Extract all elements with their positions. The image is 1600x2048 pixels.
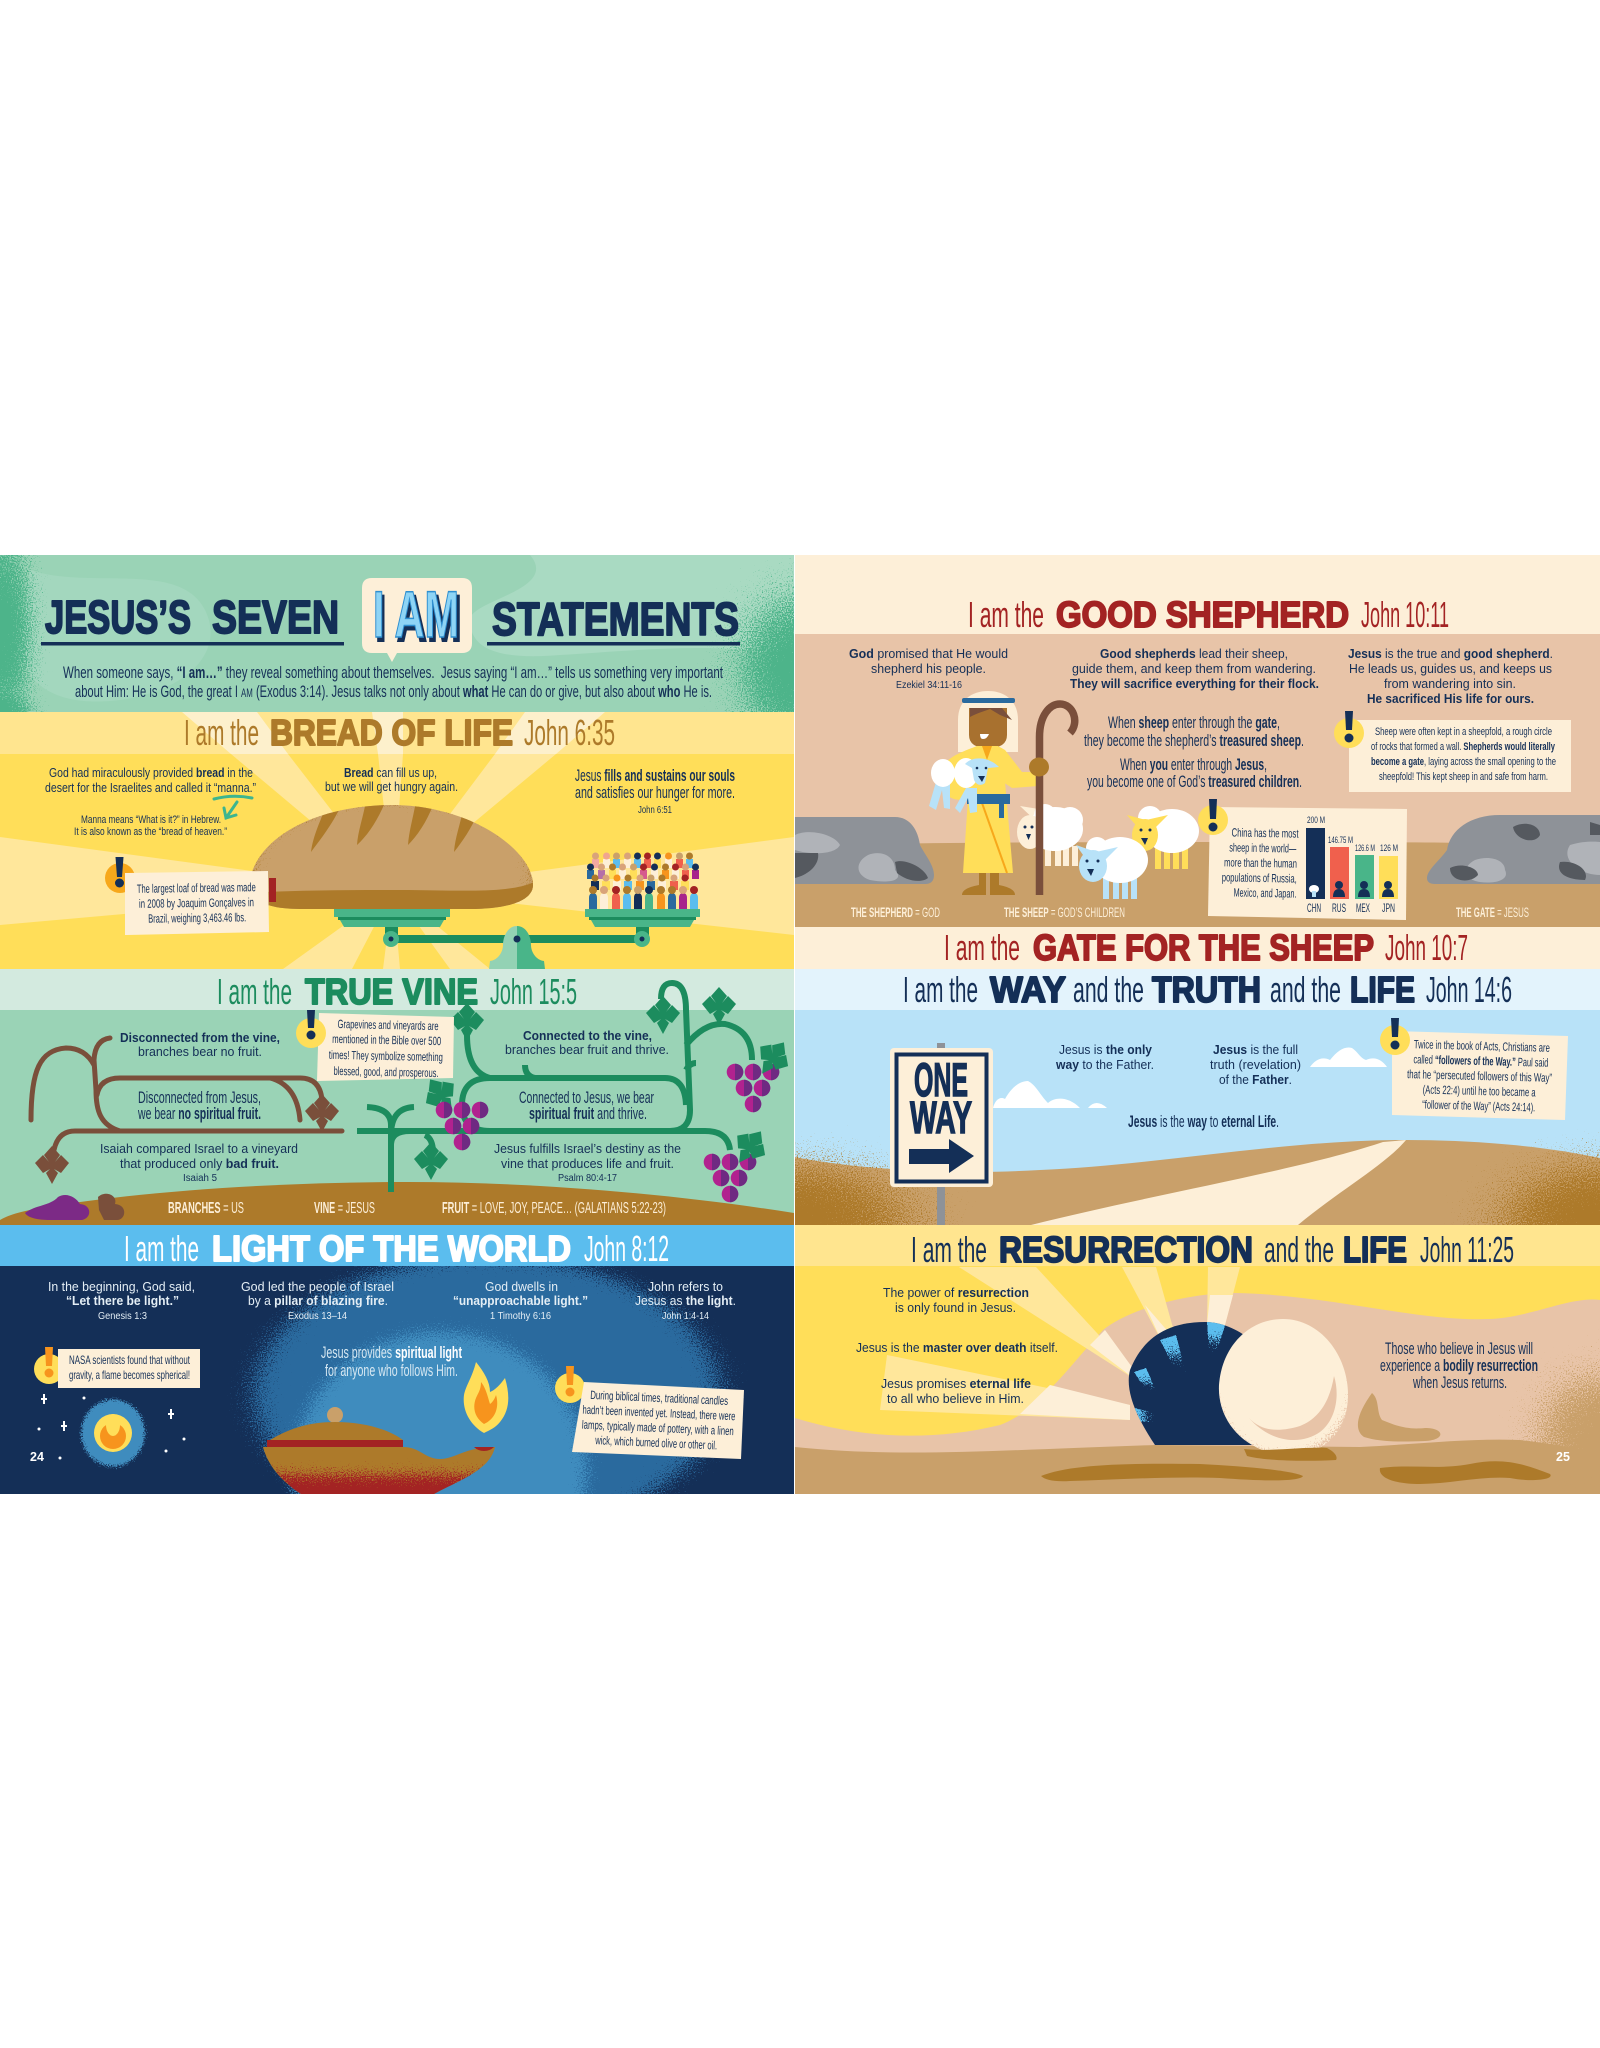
one way sign <box>890 1043 993 1225</box>
heading: bread of life: John 6:35 <box>524 712 615 753</box>
text: resurrection statements: to all who believe in Him. <box>887 1391 1024 1406</box>
oil lamp <box>255 1407 505 1494</box>
text: resurrection statements: The power of resurrection <box>883 1285 1029 1300</box>
heading: true vine: TRUE VINE <box>305 971 478 1012</box>
callout: followers of the way <box>1380 1018 1568 1120</box>
rock wall left <box>795 817 934 884</box>
text: connected: branches bear fruit and thrive. <box>505 1042 669 1057</box>
text: three shepherd columns: God promised that He would <box>849 646 1008 661</box>
text: disconnected: Disconnected from Jesus, <box>138 1089 261 1107</box>
text: disconnected: we bear no spiritual fruit. <box>137 1105 261 1123</box>
callout: largest loaf: The largest loaf of bread was made <box>137 880 256 896</box>
panel: light of the world <box>0 1225 794 1494</box>
text: four light references <box>48 1279 736 1322</box>
title: Jesus's Seven: SEVEN <box>212 591 339 643</box>
bar chart: 126 M <box>1380 843 1398 853</box>
text: resurrection statements <box>856 1285 1058 1406</box>
text: four light references: God led the people of Israel <box>241 1279 394 1294</box>
text: disconnected: that produced only bad fruit. <box>120 1156 279 1171</box>
callout: sheep population chart: Mexico, and Japan. <box>1233 886 1297 901</box>
text: disconnected: branches bear no fruit. <box>138 1044 262 1059</box>
crowd of people <box>587 852 699 909</box>
callout: lamps: hadn’t been invented yet. Instead, there were <box>582 1403 736 1423</box>
callout: grapevines: times! They symbolize something <box>329 1048 443 1064</box>
text: way statements: Jesus is the only <box>1059 1042 1153 1057</box>
text: manna: desert for the Israelites and called it “manna.” <box>45 780 256 795</box>
text: three shepherd columns: Jesus is the true and good shepherd. <box>1348 646 1553 661</box>
text: three shepherd columns: guide them, and keep them from wandering. <box>1072 661 1316 676</box>
heading: true vine: John 15:5 <box>490 971 577 1012</box>
text: three shepherd columns: He sacrificed His life for ours. <box>1367 691 1534 706</box>
green living vine <box>357 983 752 1192</box>
heading band: resurrection <box>795 1225 1600 1266</box>
text: three shepherd columns: shepherd his people. <box>871 661 986 676</box>
text: way statements: of the Father. <box>1219 1072 1292 1087</box>
heading: way truth life: LIFE <box>1350 969 1415 1010</box>
light rays over sky <box>880 1267 1240 1420</box>
heading: bread of life <box>186 718 614 746</box>
text: bodily resurrection <box>1380 1340 1538 1392</box>
heading: gate for the sheep: I am the <box>944 927 1020 968</box>
peach hill <box>795 1293 1600 1494</box>
text: manna <box>45 765 256 838</box>
callout: largest loaf <box>105 857 269 935</box>
shepherd hand <box>1029 758 1049 776</box>
text: sheep and gate: When you enter through Jesus, <box>1120 756 1267 774</box>
text: three shepherd columns: from wandering into sin. <box>1384 676 1516 691</box>
bread loaf <box>252 805 533 909</box>
ground legend: FRUIT = LOVE, JOY, PEACE… (GALATIANS 5:22-23) <box>442 1200 666 1217</box>
heading: way truth life <box>903 969 1512 1010</box>
text: four light references: “unapproachable light.” <box>453 1293 588 1308</box>
one way sign: WAY <box>910 1092 972 1143</box>
callout: largest loaf: in 2008 by Joaquim Gonçalves in <box>139 895 254 911</box>
rock wall right <box>1427 815 1600 884</box>
dead brown vine <box>31 1038 342 1184</box>
heading: bread of life: I am the <box>184 712 259 753</box>
callout: sheepfold <box>1334 711 1571 792</box>
bar chart: CHN <box>1307 901 1321 915</box>
callout: lamps <box>555 1366 744 1459</box>
one way sign: ONE <box>914 1053 968 1106</box>
callout: followers of the way: (Acts 22:4) until he too became a <box>1422 1083 1536 1099</box>
text: spiritual light: for anyone who follows Him. <box>325 1362 458 1380</box>
intro paragraph <box>63 663 723 701</box>
text: three shepherd columns: They will sacrifice everything for their flock. <box>1070 676 1319 691</box>
text: resurrection statements: is only found in Jesus. <box>895 1300 1016 1315</box>
grapes <box>436 1033 798 1202</box>
text: four light references: In the beginning, God said, <box>48 1279 195 1294</box>
text: four light references: God dwells in <box>485 1279 558 1294</box>
title: Jesus's Seven: JESUS’S <box>45 591 191 643</box>
heading: light of the world: LIGHT OF THE WORLD <box>212 1228 571 1269</box>
road <box>1031 1140 1406 1225</box>
spherical flame <box>78 1396 148 1470</box>
heading: way truth life: WAY <box>990 969 1066 1010</box>
panel: intro header <box>0 430 925 830</box>
callout: largest loaf: Brazil, weighing 3,463.46 lbs. <box>148 910 246 926</box>
heading: true vine: I am the <box>217 971 292 1012</box>
icon: teal arrow <box>214 796 252 818</box>
text: Jesus fills: and satisfies our hunger for more. <box>575 784 735 802</box>
callout: NASA <box>34 1347 200 1388</box>
bar chart: 126.6 M <box>1355 843 1375 853</box>
ground <box>795 1310 1600 1570</box>
heading: gate for the sheep: GATE FOR THE SHEEP <box>1033 927 1374 968</box>
callout: lamps: lamps, typically made of pottery, with a linen <box>582 1418 734 1438</box>
ground <box>795 842 1600 927</box>
title: Statements <box>487 602 740 646</box>
ground blobs <box>1041 1448 1551 1484</box>
blue sheep <box>1076 837 1148 899</box>
heading: bread of life: BREAD OF LIFE <box>270 712 513 753</box>
callout: NASA: NASA scientists found that without <box>69 1353 190 1367</box>
text: connected: Psalm 80:4-17 <box>558 1173 617 1184</box>
text: sheep and gate: you become one of God’s treasured children. <box>1087 773 1302 791</box>
lamb in arms <box>929 758 999 813</box>
heading: good shepherd: I am the <box>968 594 1044 635</box>
intro paragraph: about Him: He is God, the great I AM (Exodus 3:14). Jesus talks not only about what He can do or give, but also about who He is. <box>75 682 712 701</box>
rotten fruit on ground <box>25 1194 124 1220</box>
stars <box>38 1394 186 1460</box>
lamp flame <box>464 1362 508 1433</box>
sheep behind <box>1017 804 1083 866</box>
callout: lamps: wick, which burned olive or other oil. <box>594 1433 717 1453</box>
text: Jesus fills: John 6:51 <box>638 805 672 816</box>
ground labels: THE GATE = JESUS <box>1456 904 1529 920</box>
text: three shepherd columns: Good shepherds lead their sheep, <box>1100 646 1288 661</box>
callout: sheep population chart <box>1198 799 1407 920</box>
text: way statements: truth (revelation) <box>1210 1057 1301 1072</box>
callout: sheepfold: of rocks that formed a wall. Shepherds would literally <box>1371 741 1556 753</box>
panel: bread of life <box>0 712 794 969</box>
sun rays <box>0 754 794 969</box>
text: four light references: Genesis 1:3 <box>98 1311 147 1322</box>
heading: light of the world <box>126 1234 668 1262</box>
ground labels: THE SHEEP = GOD’S CHILDREN <box>1004 904 1125 920</box>
heading: way truth life: and the <box>1073 969 1144 1010</box>
scale <box>334 909 700 969</box>
bar chart: RUS <box>1332 901 1346 915</box>
text: disconnected: Isaiah 5 <box>183 1173 217 1184</box>
heading: good shepherd <box>968 594 1449 635</box>
heading: resurrection and life: and the <box>1264 1229 1334 1270</box>
callout: NASA: gravity, a flame becomes spherical! <box>69 1368 190 1382</box>
callout: followers of the way: called “followers of the Way.” Paul said <box>1413 1052 1549 1070</box>
shepherd figure <box>940 691 1038 895</box>
title: I AM speech bubble: I AM <box>375 581 462 655</box>
text: three shepherd columns <box>849 646 1553 706</box>
text: four light references: Jesus as the light. <box>635 1293 736 1308</box>
text: four light references: John 1:4-14 <box>662 1311 709 1322</box>
callout: sheep population chart: China has the most <box>1231 825 1299 841</box>
light rays over hill <box>1020 1295 1233 1420</box>
text: connected: spiritual fruit and thrive. <box>529 1105 647 1123</box>
heading: good shepherd: GOOD SHEPHERD <box>1056 594 1349 635</box>
ground <box>0 1182 794 1225</box>
text: spiritual light <box>321 1344 462 1380</box>
clouds <box>993 1048 1387 1108</box>
text: four light references: Exodus 13–14 <box>288 1311 347 1322</box>
heading: good shepherd: John 10:11 <box>1361 594 1449 635</box>
text: resurrection statements: Jesus promises eternal life <box>881 1376 1031 1391</box>
tomb opening <box>1128 1322 1290 1445</box>
callout: grapevines: Grapevines and vineyards are <box>337 1017 439 1033</box>
text: connected: Connected to Jesus, we bear <box>519 1089 654 1107</box>
heading: resurrection and life: John 11:25 <box>1420 1229 1514 1270</box>
text: Jesus fills <box>575 769 735 813</box>
heading: way truth life: TRUTH <box>1152 969 1261 1010</box>
text: four light references: John refers to <box>648 1279 723 1294</box>
text: disconnected <box>100 1030 298 1184</box>
text: four light references: “Let there be light.” <box>66 1293 179 1308</box>
callout: grapevines: mentioned in the Bible over 500 <box>332 1032 442 1048</box>
callout: followers of the way: “follower of the Way” (Acts 24:14). <box>1422 1098 1535 1114</box>
text: connected: Jesus fulfills Israel’s destiny as the <box>494 1141 681 1156</box>
ground labels <box>851 904 1529 920</box>
bar chart: 146.75 M <box>1328 835 1353 845</box>
text: connected: vine that produces life and fruit. <box>501 1156 674 1171</box>
text: sheep and gate <box>1084 714 1304 791</box>
heading: gate for the sheep: John 10:7 <box>1385 927 1468 968</box>
text: bodily resurrection: experience a bodily resurrection <box>1380 1357 1538 1375</box>
text: sheep and gate: When sheep enter through the gate, <box>1108 714 1280 732</box>
text: manna: Manna means “What is it?” in Hebrew. <box>81 814 221 826</box>
text: spiritual light: Jesus provides spiritual light <box>321 1344 462 1362</box>
text: way statements: Jesus is the way to eternal Life. <box>1128 1113 1279 1131</box>
text: four light references: by a pillar of blazing fire. <box>248 1293 388 1308</box>
text: three shepherd columns: He leads us, guides us, and keeps us <box>1349 661 1552 676</box>
shepherd crook <box>1040 704 1075 895</box>
ground legend <box>168 1202 666 1216</box>
callout: lamps: During biblical times, traditional candles <box>590 1388 728 1408</box>
text: Jesus fills: Jesus fills and sustains our souls <box>575 767 735 785</box>
panel: good shepherd and gate <box>795 555 1600 969</box>
panel: true vine <box>0 969 798 1225</box>
text: resurrection statements: Jesus is the master over death itself. <box>856 1340 1058 1355</box>
text: bread can fill: but we will get hungry again. <box>325 779 458 794</box>
ground labels: THE SHEPHERD = GOD <box>851 904 940 920</box>
heading: way truth life: and the <box>1270 969 1341 1010</box>
ground legend: BRANCHES = US <box>168 1200 244 1217</box>
hills <box>565 1105 1600 1345</box>
panel: way truth life <box>565 969 1600 1345</box>
round stone <box>1198 1280 1368 1470</box>
sun rays through heading band <box>182 712 605 754</box>
text: three shepherd columns: Ezekiel 34:11-16 <box>896 680 962 691</box>
text: disconnected: Isaiah compared Israel to a vineyard <box>100 1141 298 1156</box>
callout: grapevines: blessed, good, and prosperous. <box>333 1064 439 1080</box>
title: Statements: STATEMENTS <box>492 593 739 645</box>
text: four light references: 1 Timothy 6:16 <box>490 1311 551 1322</box>
title: I AM speech bubble <box>362 577 472 662</box>
text: bodily resurrection: when Jesus returns. <box>1412 1374 1507 1392</box>
bar chart <box>1306 815 1398 915</box>
ground legend: VINE = JESUS <box>314 1200 375 1217</box>
bar chart: MEX <box>1356 901 1370 915</box>
panel: resurrection and life <box>795 1225 1600 1570</box>
heading: resurrection and life <box>911 1229 1514 1270</box>
heading: true vine <box>218 978 576 1006</box>
page number 24: 24 <box>30 1450 44 1464</box>
text: bread can fill: Bread can fill us up, <box>344 765 437 780</box>
heading: resurrection and life: I am the <box>911 1229 987 1270</box>
bar chart: 200 M <box>1307 815 1325 825</box>
heading: resurrection and life: RESURRECTION <box>999 1229 1253 1270</box>
callout: sheep population chart: populations of Russia, <box>1222 870 1297 886</box>
title: Jesus's Seven <box>41 600 344 646</box>
intro paragraph: When someone says, “I am…” they reveal something about themselves. Jesus saying “I am…” tells us something very important <box>63 663 723 682</box>
callout: grapevines <box>296 1010 454 1081</box>
text: sheep and gate: they become the shepherd’s treasured sheep. <box>1084 732 1304 750</box>
callout: sheep population chart: sheep in the world— <box>1229 840 1296 856</box>
text: disconnected: Disconnected from the vine, <box>120 1030 280 1045</box>
tan blob on hill <box>1358 1393 1440 1442</box>
callout: sheep population chart: more than the human <box>1224 855 1297 871</box>
heading: way truth life: John 14:6 <box>1426 969 1512 1010</box>
text: way statements <box>1055 1042 1301 1131</box>
text: connected <box>494 1028 681 1184</box>
text: manna: God had miraculously provided bread in the <box>49 765 253 780</box>
yellow sheep <box>1127 806 1199 869</box>
bar chart: JPN <box>1382 901 1395 915</box>
text: connected: Connected to the vine, <box>523 1028 652 1043</box>
text: way statements: way to the Father. <box>1055 1057 1154 1072</box>
heading: light of the world: I am the <box>124 1228 199 1269</box>
heading: light of the world: John 8:12 <box>584 1228 669 1269</box>
heading: way truth life: I am the <box>903 969 978 1010</box>
text: bread can fill <box>326 768 458 794</box>
title: I AM speech bubble: I AM <box>373 577 459 651</box>
page number 25: 25 <box>1556 1450 1570 1464</box>
text: way statements: Jesus is the full <box>1213 1042 1298 1057</box>
heading: resurrection and life: LIFE <box>1343 1229 1407 1270</box>
text: manna: It is also known as the “bread of heaven.” <box>74 826 227 838</box>
